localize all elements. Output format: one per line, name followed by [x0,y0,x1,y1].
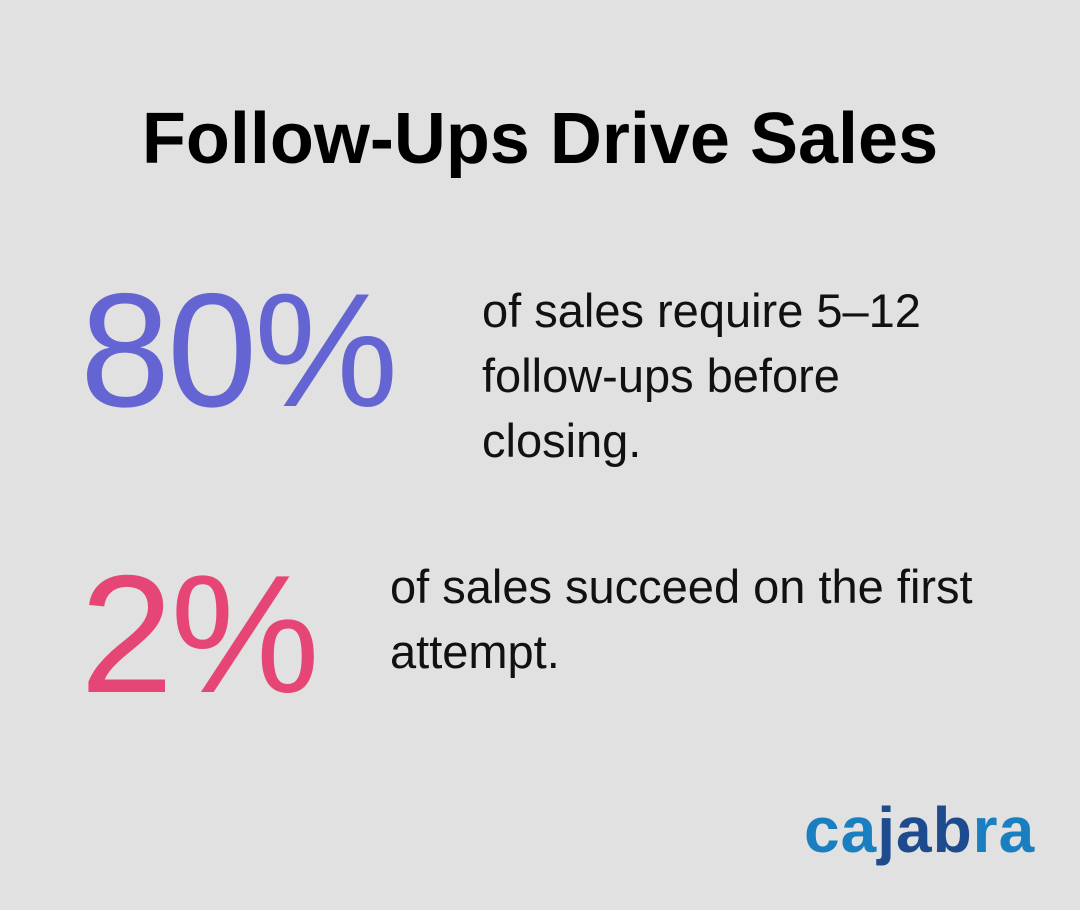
stat: 2% [80,540,973,728]
title: Follow-Ups Drive Sales [142,99,938,179]
number 2%: 2% [80,540,317,728]
text 2%: of sales succeed on the first attempt. [390,560,973,678]
stat: 80% [80,260,921,467]
number 80%: 80% [80,260,395,441]
logo: cajabra [804,794,1035,866]
text 80%: of sales require 5–12 follow-ups before closing. [482,284,921,467]
